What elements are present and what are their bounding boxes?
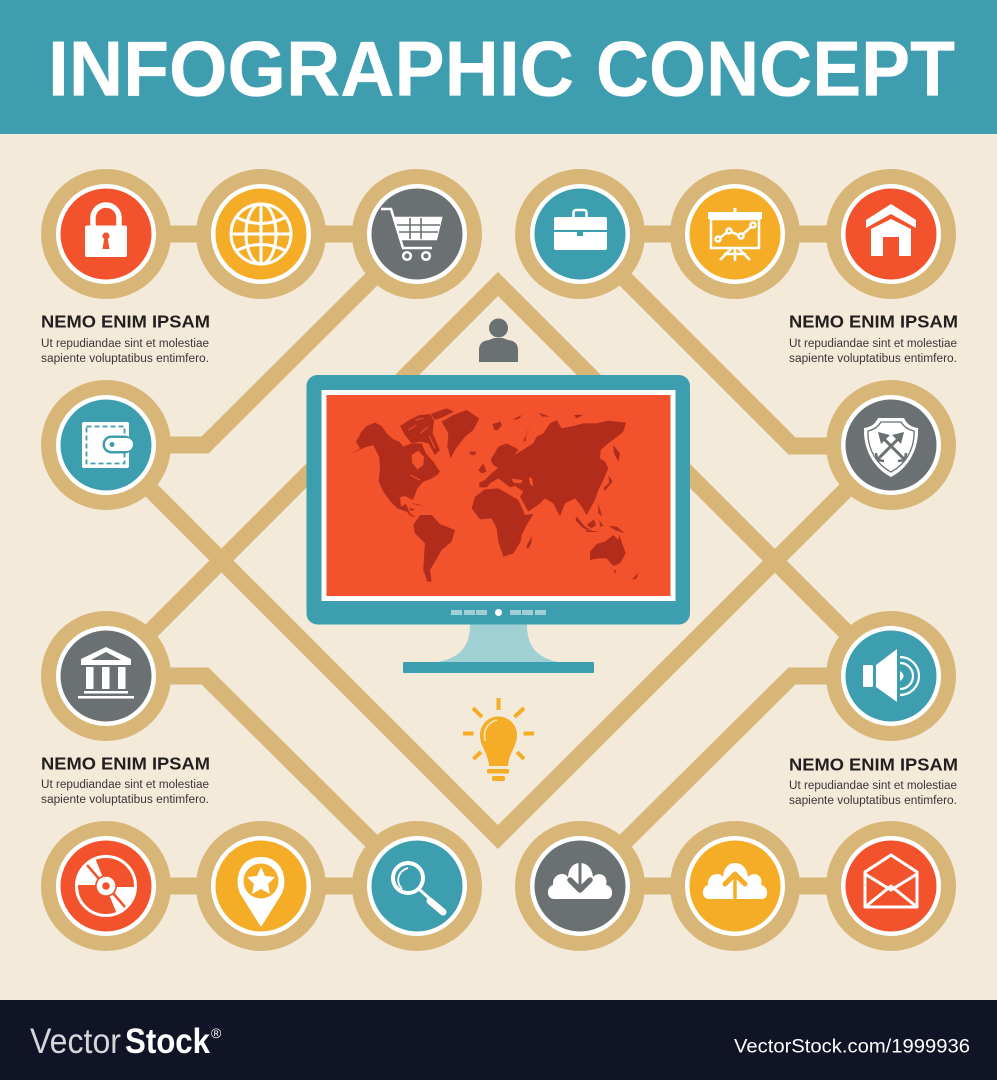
text block: top left: sapiente voluptatibus entimfero. <box>41 353 209 365</box>
title: CONCEPT <box>596 24 955 112</box>
footer url: VectorStock.com/1999936 <box>734 1036 970 1058</box>
icon: light bulb <box>463 698 534 781</box>
footer logo: Vector <box>30 1022 121 1061</box>
text block: top right: NEMO ENIM IPSAM <box>789 312 958 332</box>
icon: shield with arrows <box>864 418 918 477</box>
text block: top right <box>789 312 958 365</box>
node: compact disc <box>41 821 171 951</box>
node: magnifier <box>352 821 482 951</box>
node: cloud upload <box>670 821 800 951</box>
icon: cloud upload <box>703 863 767 899</box>
icon: padlock <box>85 205 127 257</box>
icon: speaker <box>863 649 919 702</box>
icon: map pin with star <box>238 857 284 927</box>
text block: bottom right: sapiente voluptatibus entimfero. <box>789 795 957 807</box>
monitor with world map <box>306 375 690 673</box>
text block: bottom left: sapiente voluptatibus entimfero. <box>41 794 209 806</box>
icon: wallet <box>82 422 134 468</box>
icon: briefcase <box>554 210 607 250</box>
text block: bottom right: Ut repudiandae sint et molestiae <box>789 780 957 792</box>
footer logo <box>30 1022 222 1061</box>
node: map pin <box>196 821 326 951</box>
text block: bottom left: NEMO ENIM IPSAM <box>41 754 210 774</box>
text block: top left: NEMO ENIM IPSAM <box>41 312 210 332</box>
icon: cloud download <box>548 863 612 899</box>
icon: person <box>479 318 518 362</box>
text block: bottom right <box>789 754 958 807</box>
icon: globe <box>231 204 291 264</box>
footer bar <box>0 1000 997 1080</box>
monitor stand <box>438 624 558 662</box>
text block: bottom left <box>41 754 210 806</box>
icon: disc <box>76 856 136 916</box>
text block: bottom left: Ut repudiandae sint et molestiae <box>41 779 209 791</box>
title: INFOGRAPHIC <box>48 24 574 112</box>
node: wallet <box>41 380 171 510</box>
title <box>48 24 955 112</box>
node: cloud download <box>515 821 645 951</box>
node: speaker <box>826 611 956 741</box>
footer logo: ® <box>211 1025 222 1041</box>
connector lines <box>106 234 891 886</box>
icon: cart <box>381 209 441 260</box>
icon: magnifier <box>393 863 443 912</box>
monitor buttons <box>451 609 546 616</box>
node: padlock <box>41 169 171 299</box>
text block: top left: Ut repudiandae sint et molestiae <box>41 338 209 350</box>
node: presentation board <box>670 169 800 299</box>
text block: bottom right: NEMO ENIM IPSAM <box>789 754 958 774</box>
node: house <box>826 169 956 299</box>
node: shopping cart <box>352 169 482 299</box>
node: briefcase <box>515 169 645 299</box>
text block: top right: sapiente voluptatibus entimfero. <box>789 353 957 365</box>
icon: house <box>866 204 916 256</box>
icon: bank building <box>78 647 134 698</box>
node: globe <box>196 169 326 299</box>
footer logo: Stock <box>125 1022 210 1061</box>
node: shield <box>826 380 956 510</box>
text block: top left <box>41 312 210 365</box>
text block: top right: Ut repudiandae sint et molestiae <box>789 338 957 350</box>
node: envelope <box>826 821 956 951</box>
icon: open envelope <box>865 855 917 907</box>
world map <box>352 408 638 582</box>
header banner <box>0 0 997 134</box>
node: bank <box>41 611 171 741</box>
icon: presentation board <box>708 208 762 261</box>
